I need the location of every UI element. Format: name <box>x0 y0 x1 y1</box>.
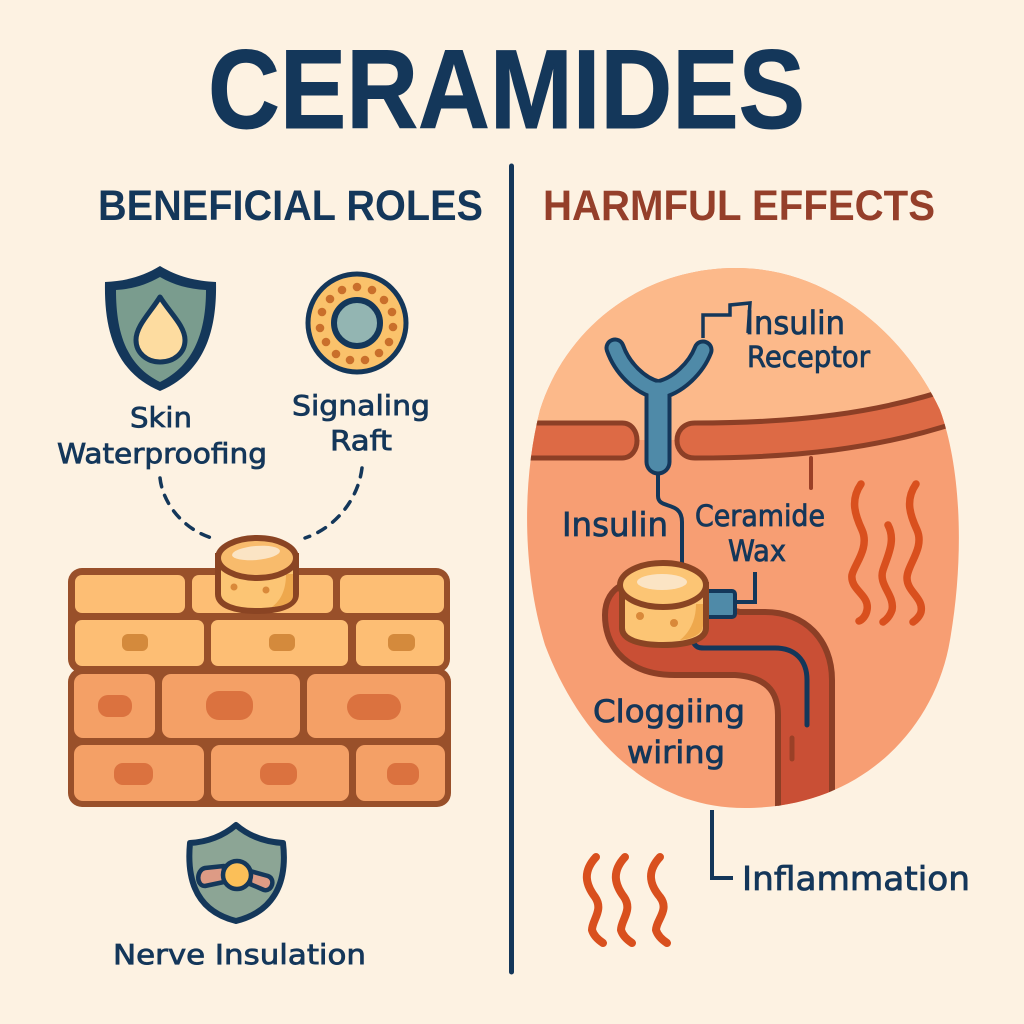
inflammation leader line <box>712 810 733 878</box>
title: CERAMIDES <box>208 27 805 152</box>
clogged artery <box>605 585 832 830</box>
label: insulin: Insulin <box>562 505 668 544</box>
cell background <box>520 260 970 830</box>
icon: nerve insulation shield <box>189 825 284 921</box>
label: insulin receptor <box>745 304 870 374</box>
insulin wiring line <box>658 470 682 564</box>
label: clogging wiring: wiring <box>627 735 725 771</box>
navy wire in artery <box>693 642 807 725</box>
wax leader line <box>736 572 755 602</box>
dashed connector left <box>160 478 212 538</box>
label: skin waterproofing <box>57 401 267 470</box>
label: skin waterproofing: Skin <box>130 401 192 434</box>
label: skin waterproofing: Waterproofing <box>57 437 267 470</box>
label: ceramide wax: Wax <box>728 534 786 568</box>
ceramide wax plug <box>218 538 296 611</box>
heading: beneficial roles: BENEFICIAL ROLES <box>98 182 483 230</box>
label: inflammation: Inflammation <box>742 859 970 898</box>
label: signaling raft: Raft <box>330 424 392 457</box>
insulin receptor icon <box>615 348 703 462</box>
label: ceramide wax: Ceramide <box>695 499 825 533</box>
label: insulin receptor: Insulin <box>745 304 845 342</box>
label: clogging wiring <box>593 694 745 771</box>
dashed connector right <box>305 468 362 538</box>
artery tick <box>790 738 794 759</box>
icon: signaling raft <box>308 274 406 372</box>
panel: beneficial roles <box>57 266 451 971</box>
center divider <box>509 166 514 972</box>
label: signaling raft <box>292 389 430 457</box>
inflammation waves bottom <box>587 857 667 943</box>
brick wall <box>68 568 451 807</box>
panel: harmful effects cell <box>520 260 970 943</box>
icon: skin waterproofing shield <box>105 266 216 391</box>
label: nerve insulation: Nerve Insulation <box>113 938 366 971</box>
membrane tick <box>809 458 813 488</box>
blue connector box <box>706 591 735 617</box>
heading: harmful effects: HARMFUL EFFECTS <box>543 182 935 230</box>
label: ceramide wax <box>695 499 825 568</box>
label: clogging wiring: Cloggiing <box>593 694 745 730</box>
label: signaling raft: Signaling <box>292 389 430 422</box>
receptor leader line <box>703 303 750 338</box>
inflammation waves in cell <box>852 484 921 622</box>
cell membrane <box>530 392 946 460</box>
ceramide plug in artery <box>620 563 706 645</box>
label: insulin receptor: Receptor <box>747 340 870 374</box>
